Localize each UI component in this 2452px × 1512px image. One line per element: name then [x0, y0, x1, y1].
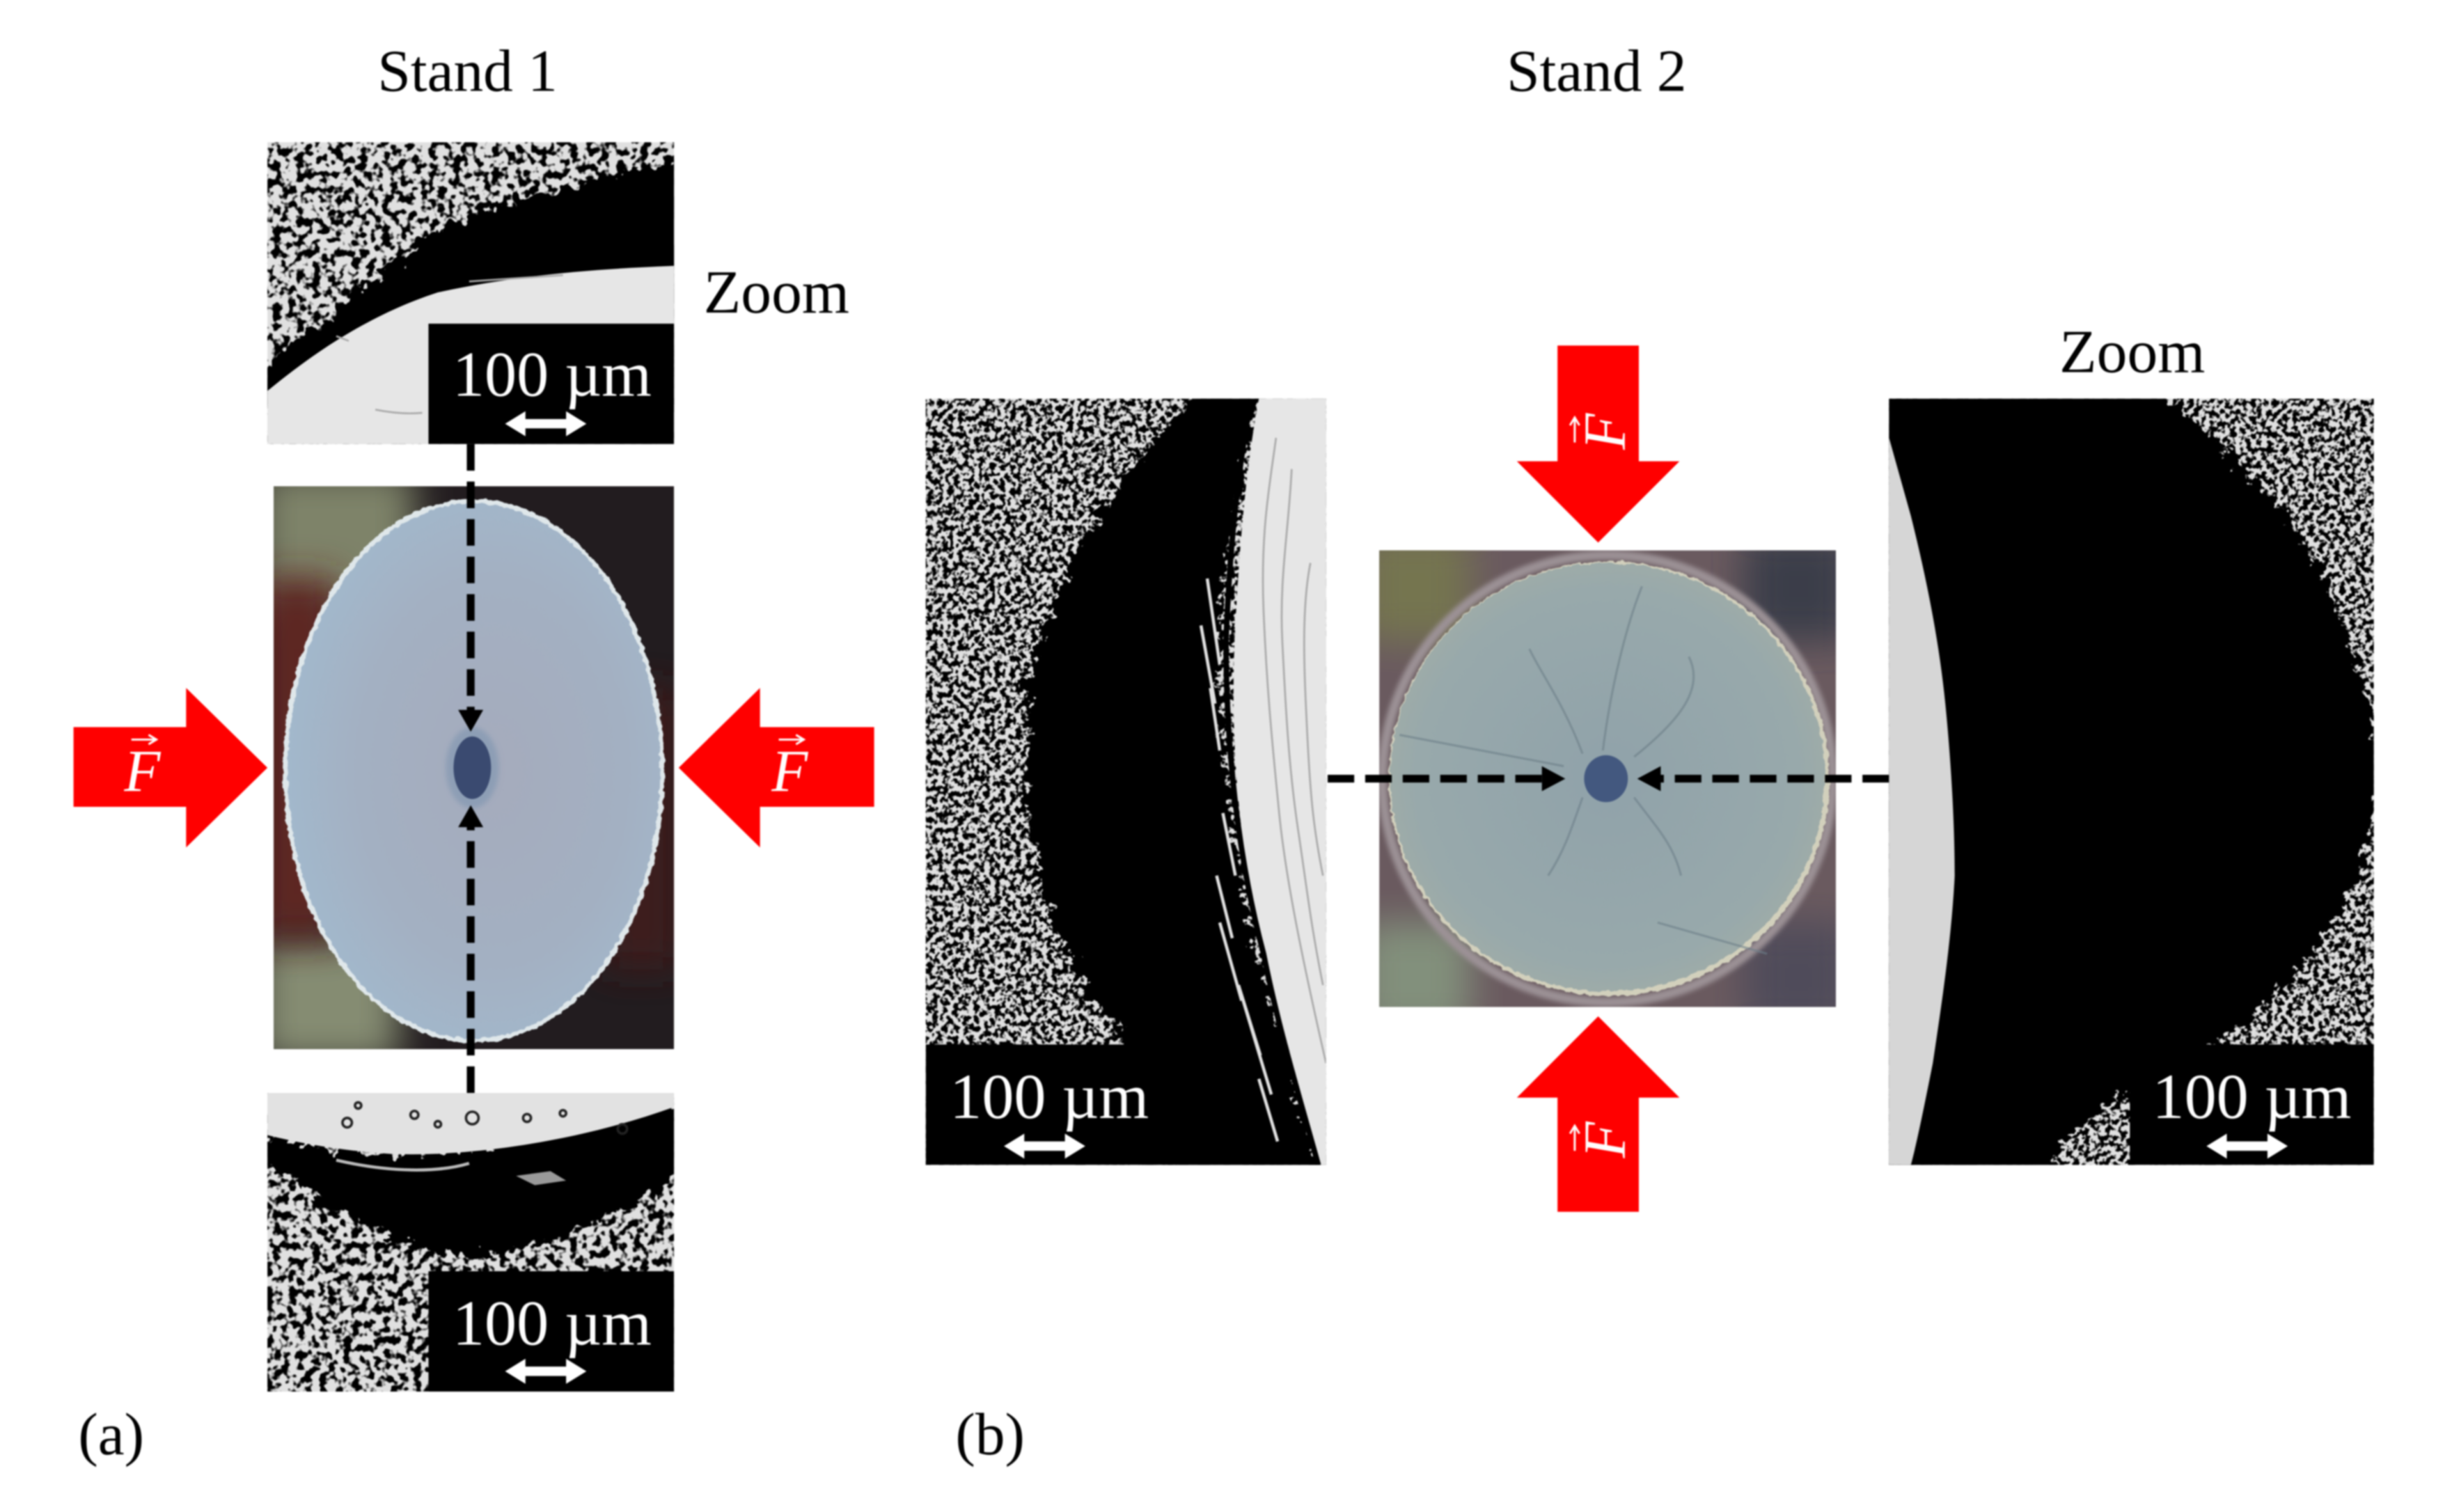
arrow: force from left (Stand 1): F — [123, 739, 161, 805]
panel: Stand 1 top micrograph — [266, 141, 675, 446]
arrow: Stand 1 dashed bottom to hole — [458, 805, 483, 1093]
panel: Stand 2 centre photo — [1378, 549, 1837, 1008]
arrow: force from right (Stand 1) — [679, 688, 874, 847]
label: (b): (b) — [955, 1402, 1025, 1467]
panel: Stand 1 centre photo — [258, 469, 680, 1063]
heading: Stand 1: Stand 1 — [377, 38, 558, 104]
label: Zoom (Stand 1): Zoom — [704, 258, 849, 326]
scale label — [2130, 1044, 2374, 1165]
scale label — [428, 1271, 674, 1392]
arrow: Stand 2 dashed right to hole — [1637, 766, 1889, 792]
label: Zoom (Stand 2): Zoom — [2059, 318, 2205, 386]
hole — [453, 737, 491, 799]
panel: Stand 1 bottom micrograph — [250, 1093, 696, 1392]
scale label: 100 µm — [950, 1061, 1149, 1132]
arrow: Stand 2 dashed left to hole — [1328, 766, 1565, 792]
label: (a): (a) — [78, 1402, 144, 1467]
scale label: 100 µm — [2153, 1061, 2351, 1132]
arrow: force from top (Stand 2): F — [1573, 413, 1638, 450]
arrow: force from bottom (Stand 2) — [1517, 1016, 1679, 1212]
heading: Stand 2: Stand 2 — [1507, 38, 1687, 104]
arrow: force from right (Stand 1): F — [771, 739, 808, 805]
hole — [1584, 755, 1628, 802]
scale label — [428, 324, 674, 444]
arrow: Stand 1 dashed top to hole — [458, 444, 483, 732]
arrow: force from bottom (Stand 2): F — [1573, 1121, 1638, 1158]
panel: Stand 2 left micrograph — [926, 388, 1333, 1176]
scale label: 100 µm — [453, 1288, 652, 1359]
panel: Stand 2 right micrograph — [1861, 388, 2378, 1176]
scale label — [926, 1044, 1173, 1165]
arrow: force from top (Stand 2) — [1517, 345, 1679, 542]
scale label: 100 µm — [453, 338, 652, 409]
arrow: force from left (Stand 1) — [74, 688, 267, 847]
